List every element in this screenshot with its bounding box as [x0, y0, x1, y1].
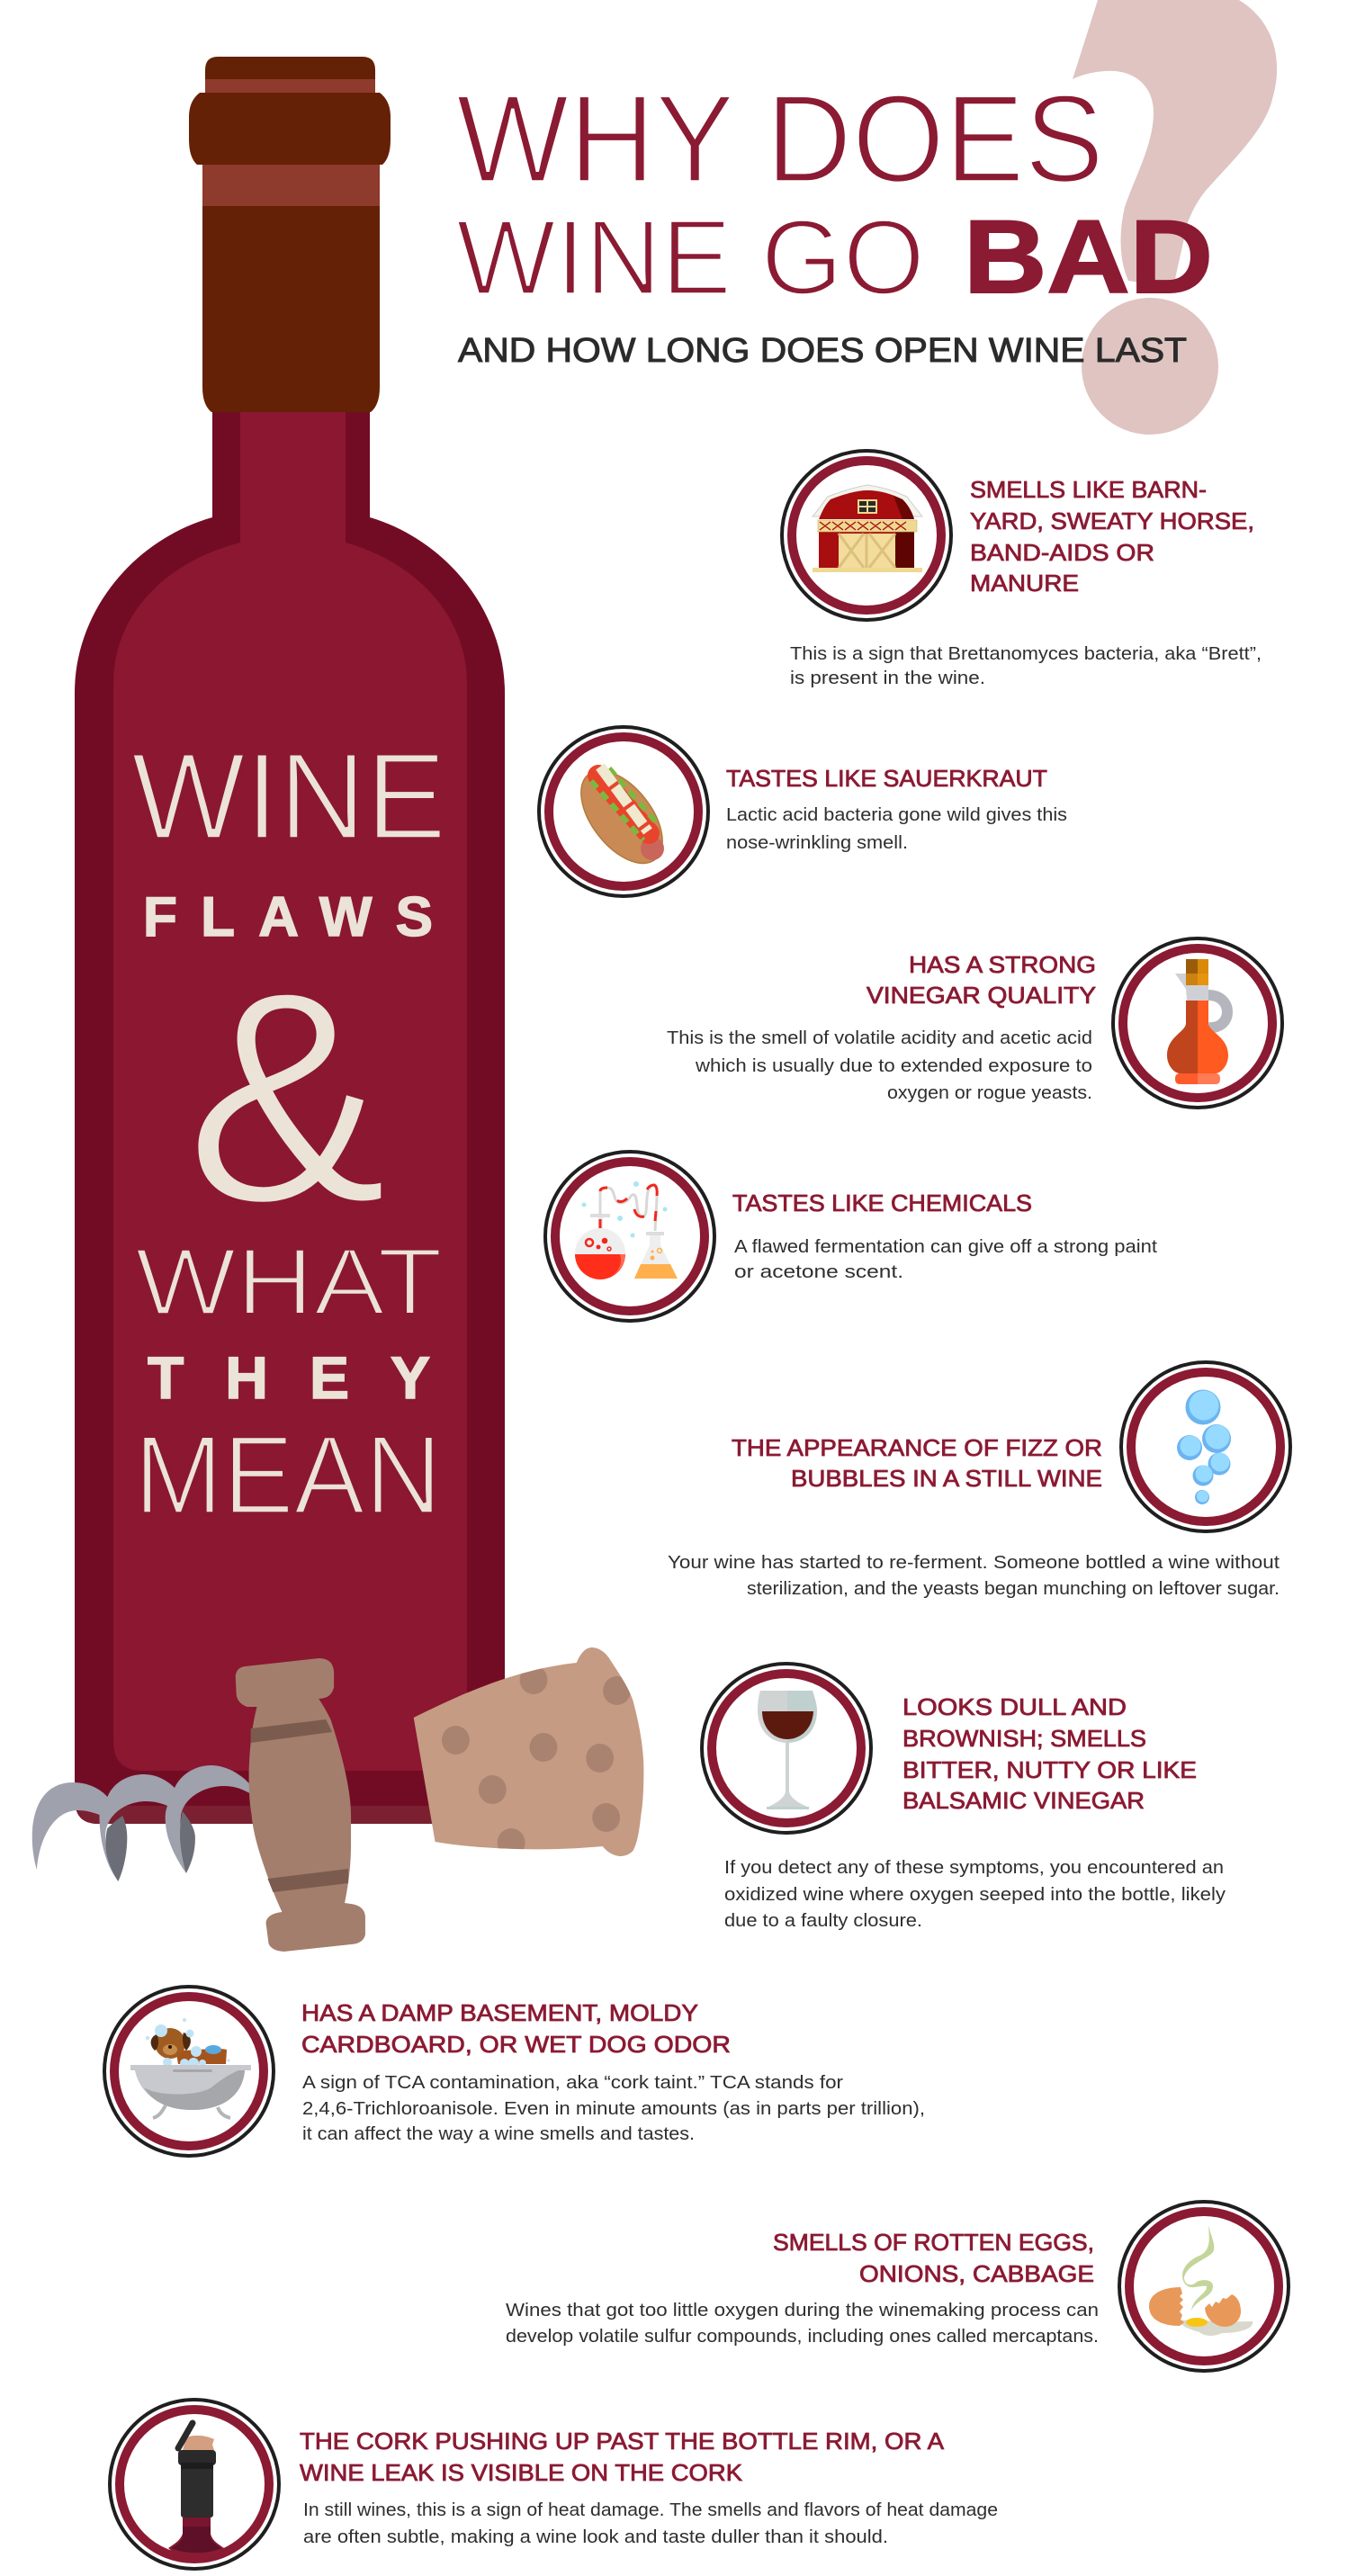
- text block: due to a faulty closure.: [724, 1910, 922, 1931]
- heading: HAS A DAMP BASEMENT, MOLDY: [301, 1999, 698, 2026]
- heading: [970, 476, 1254, 597]
- heading: [732, 1434, 1102, 1492]
- panel: chemical taste: [545, 1152, 1157, 1321]
- bottle body: [75, 412, 505, 1824]
- title: BAD: [964, 200, 1213, 315]
- text block: sterilization, and the yeasts began munching on leftover sugar.: [747, 1578, 1280, 1599]
- text block: [724, 1857, 1226, 1931]
- text block: nose-wrinkling smell.: [726, 832, 908, 853]
- title: WHY DOES: [456, 69, 1104, 209]
- text block: [302, 2072, 925, 2144]
- bottle label text: WINE: [131, 728, 446, 866]
- heading: [300, 2428, 945, 2486]
- panel: cork pushing up: [110, 2400, 998, 2569]
- text block: A sign of TCA contamination, aka “cork taint.” TCA stands for: [302, 2072, 843, 2093]
- heading: THE CORK PUSHING UP PAST THE BOTTLE RIM, OR A: [300, 2428, 945, 2455]
- text block: Your wine has started to re-ferment. Someone bottled a wine without: [668, 1552, 1280, 1573]
- icon: vinegar bottle: [1113, 938, 1282, 1108]
- text block: [726, 804, 1067, 853]
- bottle capsule: [189, 57, 391, 412]
- text block: [667, 1028, 1092, 1103]
- heading: WINE LEAK IS VISIBLE ON THE CORK: [300, 2459, 743, 2486]
- bottle label text: THEY: [148, 1344, 430, 1411]
- bottle label text: &: [185, 929, 388, 1265]
- text block: [506, 2300, 1099, 2347]
- heading: VINEGAR QUALITY: [867, 982, 1096, 1009]
- icon: hot dog: [539, 727, 708, 896]
- subtitle: AND HOW LONG DOES OPEN WINE LAST: [458, 332, 1187, 370]
- heading: THE APPEARANCE OF FIZZ OR: [732, 1434, 1102, 1461]
- bottle label text: MEAN: [134, 1414, 442, 1538]
- text block: If you detect any of these symptoms, you encountered an: [724, 1857, 1224, 1878]
- heading: HAS A STRONG: [909, 951, 1096, 978]
- text block: oxidized wine where oxygen seeped into the bottle, likely: [724, 1884, 1226, 1905]
- text block: oxygen or rogue yeasts.: [887, 1082, 1092, 1103]
- icon: wet dog in bathtub: [104, 1987, 274, 2156]
- panel: fizz or bubbles: [668, 1362, 1290, 1599]
- heading: YARD, SWEATY HORSE,: [970, 507, 1254, 534]
- text block: is present in the wine.: [790, 668, 985, 688]
- icon: rotten egg: [1119, 2202, 1289, 2371]
- text block: are often subtle, making a wine look and taste duller than it should.: [303, 2527, 888, 2547]
- heading: CARDBOARD, OR WET DOG ODOR: [301, 2031, 731, 2058]
- text block: Wines that got too little oxygen during the winemaking process can: [506, 2300, 1099, 2320]
- heading: [902, 1693, 1197, 1814]
- panel: vinegar quality: [667, 938, 1282, 1108]
- heading: MANURE: [970, 570, 1079, 597]
- bottle label text: WHAT: [135, 1229, 443, 1335]
- panel: rotten eggs: [506, 2202, 1289, 2371]
- icon: chemistry flasks: [545, 1152, 714, 1321]
- heading: LOOKS DULL AND: [902, 1693, 1127, 1720]
- heading: ONIONS, CABBAGE: [859, 2260, 1094, 2287]
- wine bottle: [75, 57, 505, 1824]
- heading: BAND-AIDS OR: [970, 539, 1154, 566]
- icon: wine glass: [702, 1664, 871, 1833]
- text block: develop volatile sulfur compounds, including ones called mercaptans.: [506, 2326, 1099, 2347]
- corkscrew spiral: [32, 1765, 250, 1881]
- panel: damp basement: [104, 1987, 925, 2156]
- heading: [301, 1999, 731, 2058]
- heading: TASTES LIKE SAUERKRAUT: [726, 765, 1047, 792]
- text block: [734, 1236, 1157, 1282]
- title: WINE GO: [456, 198, 925, 318]
- text block: it can affect the way a wine smells and tastes.: [302, 2123, 695, 2144]
- text block: [790, 643, 1262, 688]
- panel: sauerkraut taste: [539, 727, 1067, 896]
- text block: This is the smell of volatile acidity and acetic acid: [667, 1028, 1092, 1048]
- icon: bubbles: [1121, 1362, 1290, 1531]
- cork: [414, 1647, 643, 1857]
- heading: BROWNISH; SMELLS: [902, 1725, 1146, 1752]
- heading: BITTER, NUTTY OR LIKE: [902, 1756, 1197, 1783]
- text block: A flawed fermentation can give off a strong paint: [734, 1236, 1157, 1257]
- bottle label text: [131, 728, 446, 1538]
- heading: [773, 2229, 1094, 2287]
- heading: [867, 951, 1096, 1009]
- icon: barn: [782, 451, 951, 620]
- heading: TASTES LIKE CHEMICALS: [732, 1189, 1032, 1216]
- panel: barnyard smell: [782, 451, 1262, 688]
- panel: dull and brownish: [702, 1664, 1226, 1931]
- text block: This is a sign that Brettanomyces bacteria, aka “Brett”,: [790, 643, 1262, 664]
- text block: [668, 1552, 1280, 1599]
- bottle label text: FLAWS: [143, 886, 433, 948]
- text block: which is usually due to extended exposure to: [695, 1055, 1092, 1076]
- text block: 2,4,6-Trichloroanisole. Even in minute amounts (as in parts per trillion),: [302, 2098, 925, 2119]
- icon: bottle with raised cork: [110, 2400, 279, 2569]
- corkscrew: [32, 1658, 365, 1952]
- heading: SMELLS OF ROTTEN EGGS,: [773, 2229, 1094, 2256]
- heading: SMELLS LIKE BARN-: [970, 476, 1207, 503]
- heading: BALSAMIC VINEGAR: [902, 1787, 1145, 1814]
- text block: In still wines, this is a sign of heat damage. The smells and flavors of heat damage: [303, 2500, 998, 2520]
- text block: [303, 2500, 998, 2547]
- text block: Lactic acid bacteria gone wild gives this: [726, 804, 1067, 825]
- heading: BUBBLES IN A STILL WINE: [791, 1465, 1102, 1492]
- text block: or acetone scent.: [734, 1261, 903, 1282]
- corkscrew handle: [236, 1658, 365, 1952]
- question mark background: [1073, 0, 1277, 435]
- title: [456, 69, 1213, 318]
